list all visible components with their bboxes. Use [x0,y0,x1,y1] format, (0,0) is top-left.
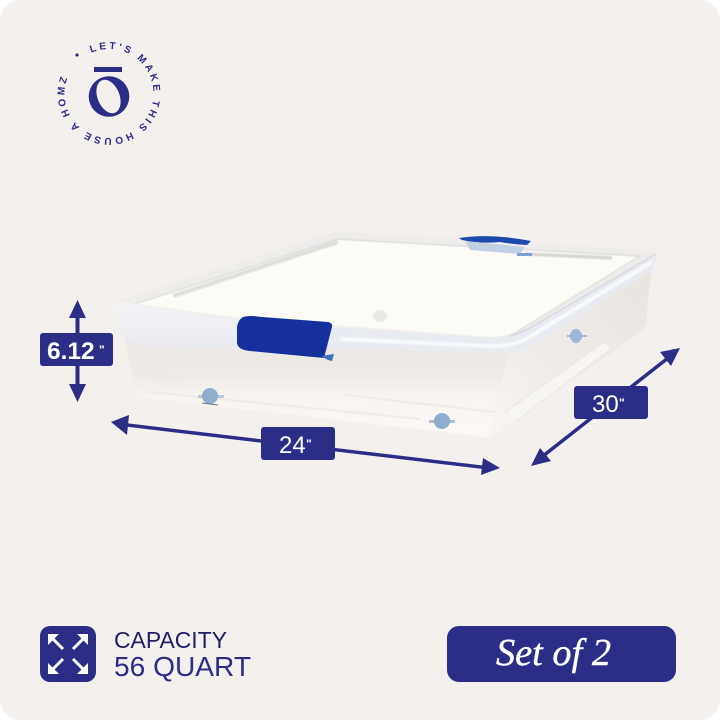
bullet dot [75,53,79,57]
logo letter o [89,76,129,117]
circular slogan: LET'S MAKE THIS HOUSE A HOMZ [57,42,160,145]
product: clear storage box [115,232,658,437]
lid groove left [173,242,338,296]
front face tray lines [134,372,495,419]
depth dimension: 30 inches: " [619,396,625,410]
height dimension: 6.12 inches: " [99,343,105,357]
height label [40,333,113,366]
rim edge [510,254,656,336]
depth dimension: 30 inches: 30 [592,391,619,418]
logo macron bar [94,67,122,72]
width arrow [111,415,500,475]
rim highlight [340,262,652,346]
width dimension: 24 inches: 24 [279,432,306,459]
box front face [122,325,513,437]
lid groove right [525,254,612,258]
lid inner rim [135,239,640,331]
wheel front left [198,388,224,405]
box right face [488,262,652,437]
width dimension: 24 inches [111,415,500,475]
latch hinge clip [321,354,334,361]
depth arrow [531,348,680,466]
icon: expand arrows [40,626,96,682]
set of 2 badge [447,626,676,682]
depth dimension: 30 inches [531,348,680,466]
width dimension: 24 inches: " [306,437,312,451]
width label [261,427,335,460]
right face tray line [505,342,612,422]
height arrow [69,300,86,402]
front blue latch [237,316,332,358]
wheel seen through lid [373,310,387,322]
wheel front right [429,413,455,429]
logo badge [57,42,160,145]
lid front rim left [115,302,240,350]
lid front rim right [325,254,658,353]
height dimension: 6.12 inches: 6.12 [47,338,95,365]
lid outer flange [118,232,658,346]
rear blue latch [459,236,532,256]
badge text: Set of 2 [496,632,611,674]
wheel rear right [567,329,587,343]
capacity value: 56 QUART [114,651,251,682]
depth label [574,386,648,419]
capacity block [40,626,251,682]
height dimension: 6.12 inches [40,300,113,402]
capacity label: CAPACITY [114,627,227,653]
lid top panel [135,240,640,337]
